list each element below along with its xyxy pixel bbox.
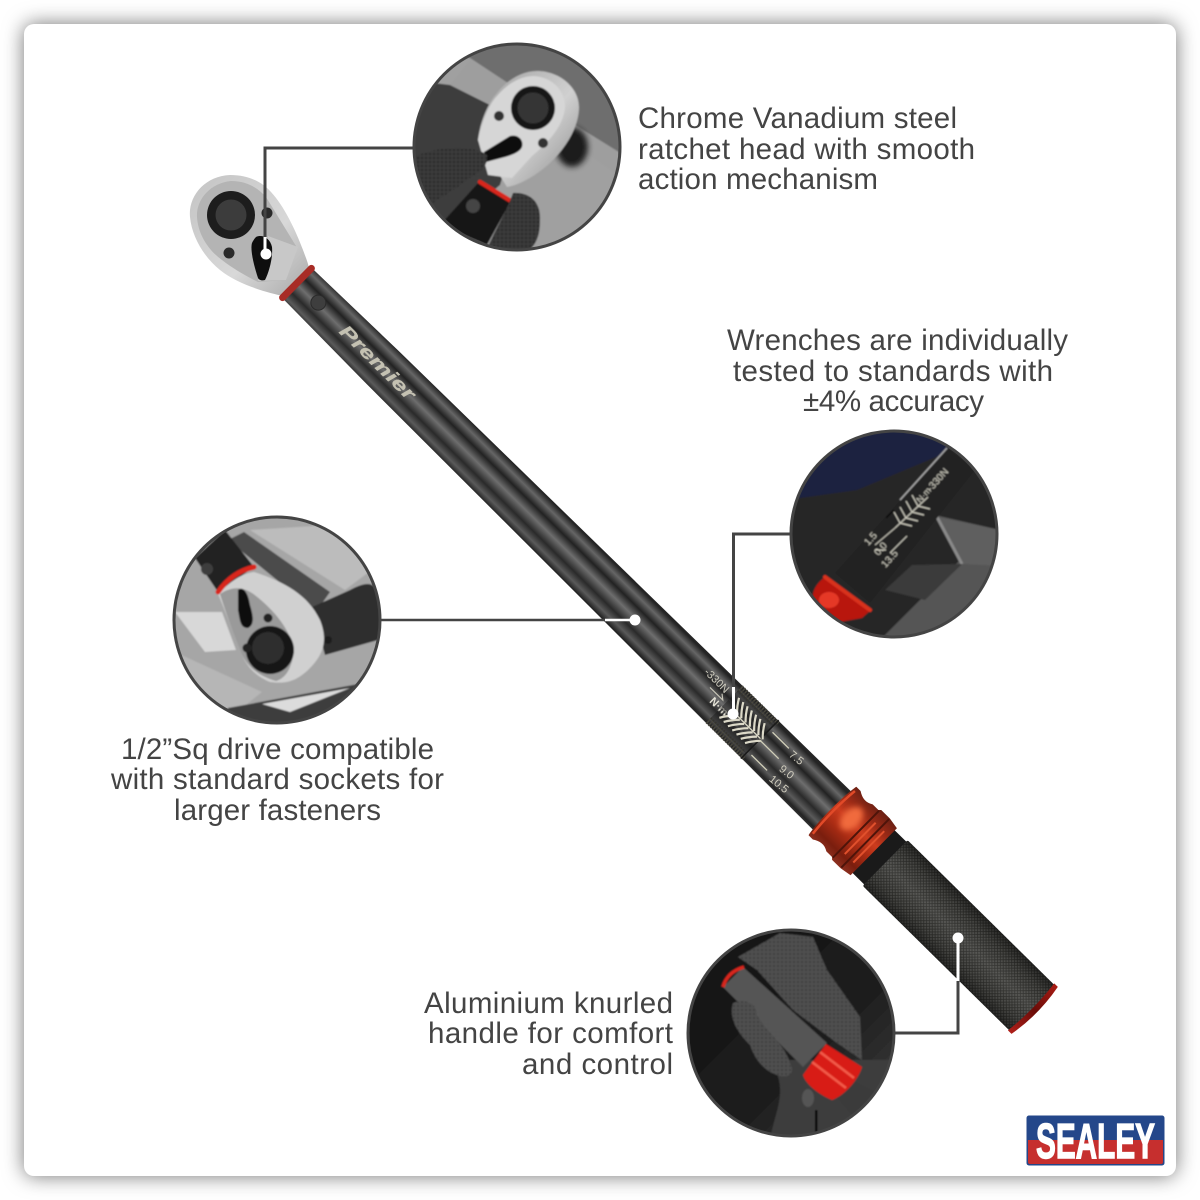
photo: torque scale close-up: 0.0 [872,540,890,558]
text: square drive [110,733,444,827]
torque scale: -330N [701,666,731,696]
callout line: torque scale [728,534,790,720]
text: handle: handle for comfort [428,1017,673,1050]
torque scale: N·m [707,695,731,719]
photo: torque scale close-up: 13.5 [880,548,901,570]
torque scale: 7.5 [786,749,806,768]
photo: torque scale close-up: N·m [914,485,933,505]
photo: ratchet head close-up [412,42,622,252]
torque scale [679,659,819,798]
shaft pin [308,292,329,313]
knurled handle [862,839,1060,1036]
wrench ratchet head [190,175,309,296]
wrench body along axis [270,256,1061,1037]
photo: torque scale close-up: -330N [925,467,951,494]
text: ratchet head: Chrome Vanadium steel [638,102,957,135]
text: square drive: larger fasteners [174,794,381,827]
text: square drive: 1/2”Sq drive compatible [121,733,434,766]
red ring near head [278,263,316,303]
text: accuracy: tested to standards with [733,355,1053,388]
torque wrench [190,175,1061,1037]
brand name on shaft: Premier [336,321,420,405]
text: handle: Aluminium knurled [424,987,673,1020]
text: square drive: with standard sockets for [110,763,444,796]
text: ratchet head: action mechanism [638,163,878,196]
torque scale: 9.0 [777,763,796,782]
photo: torque scale close-up: 1.5 [862,530,880,548]
shaft [278,264,851,830]
callout line: handle [895,932,964,1033]
text: accuracy: Wrenches are individually [727,324,1068,357]
text: handle [424,987,673,1081]
text: handle: and control [522,1048,673,1081]
text: accuracy [727,324,1068,418]
photo: gloved hand on handle [685,925,900,1140]
callout line: ratchet head [260,148,414,260]
torque scale: 10.5 [766,773,791,796]
text: accuracy: ±4% accuracy [803,385,984,418]
text: ratchet head [638,102,975,196]
photo: square drive close-up [170,515,385,730]
photo: torque scale close-up [785,425,1005,645]
red adjustment collar [806,785,913,891]
callout line: square drive [381,614,640,626]
text: ratchet head: ratchet head with smooth [638,133,975,166]
